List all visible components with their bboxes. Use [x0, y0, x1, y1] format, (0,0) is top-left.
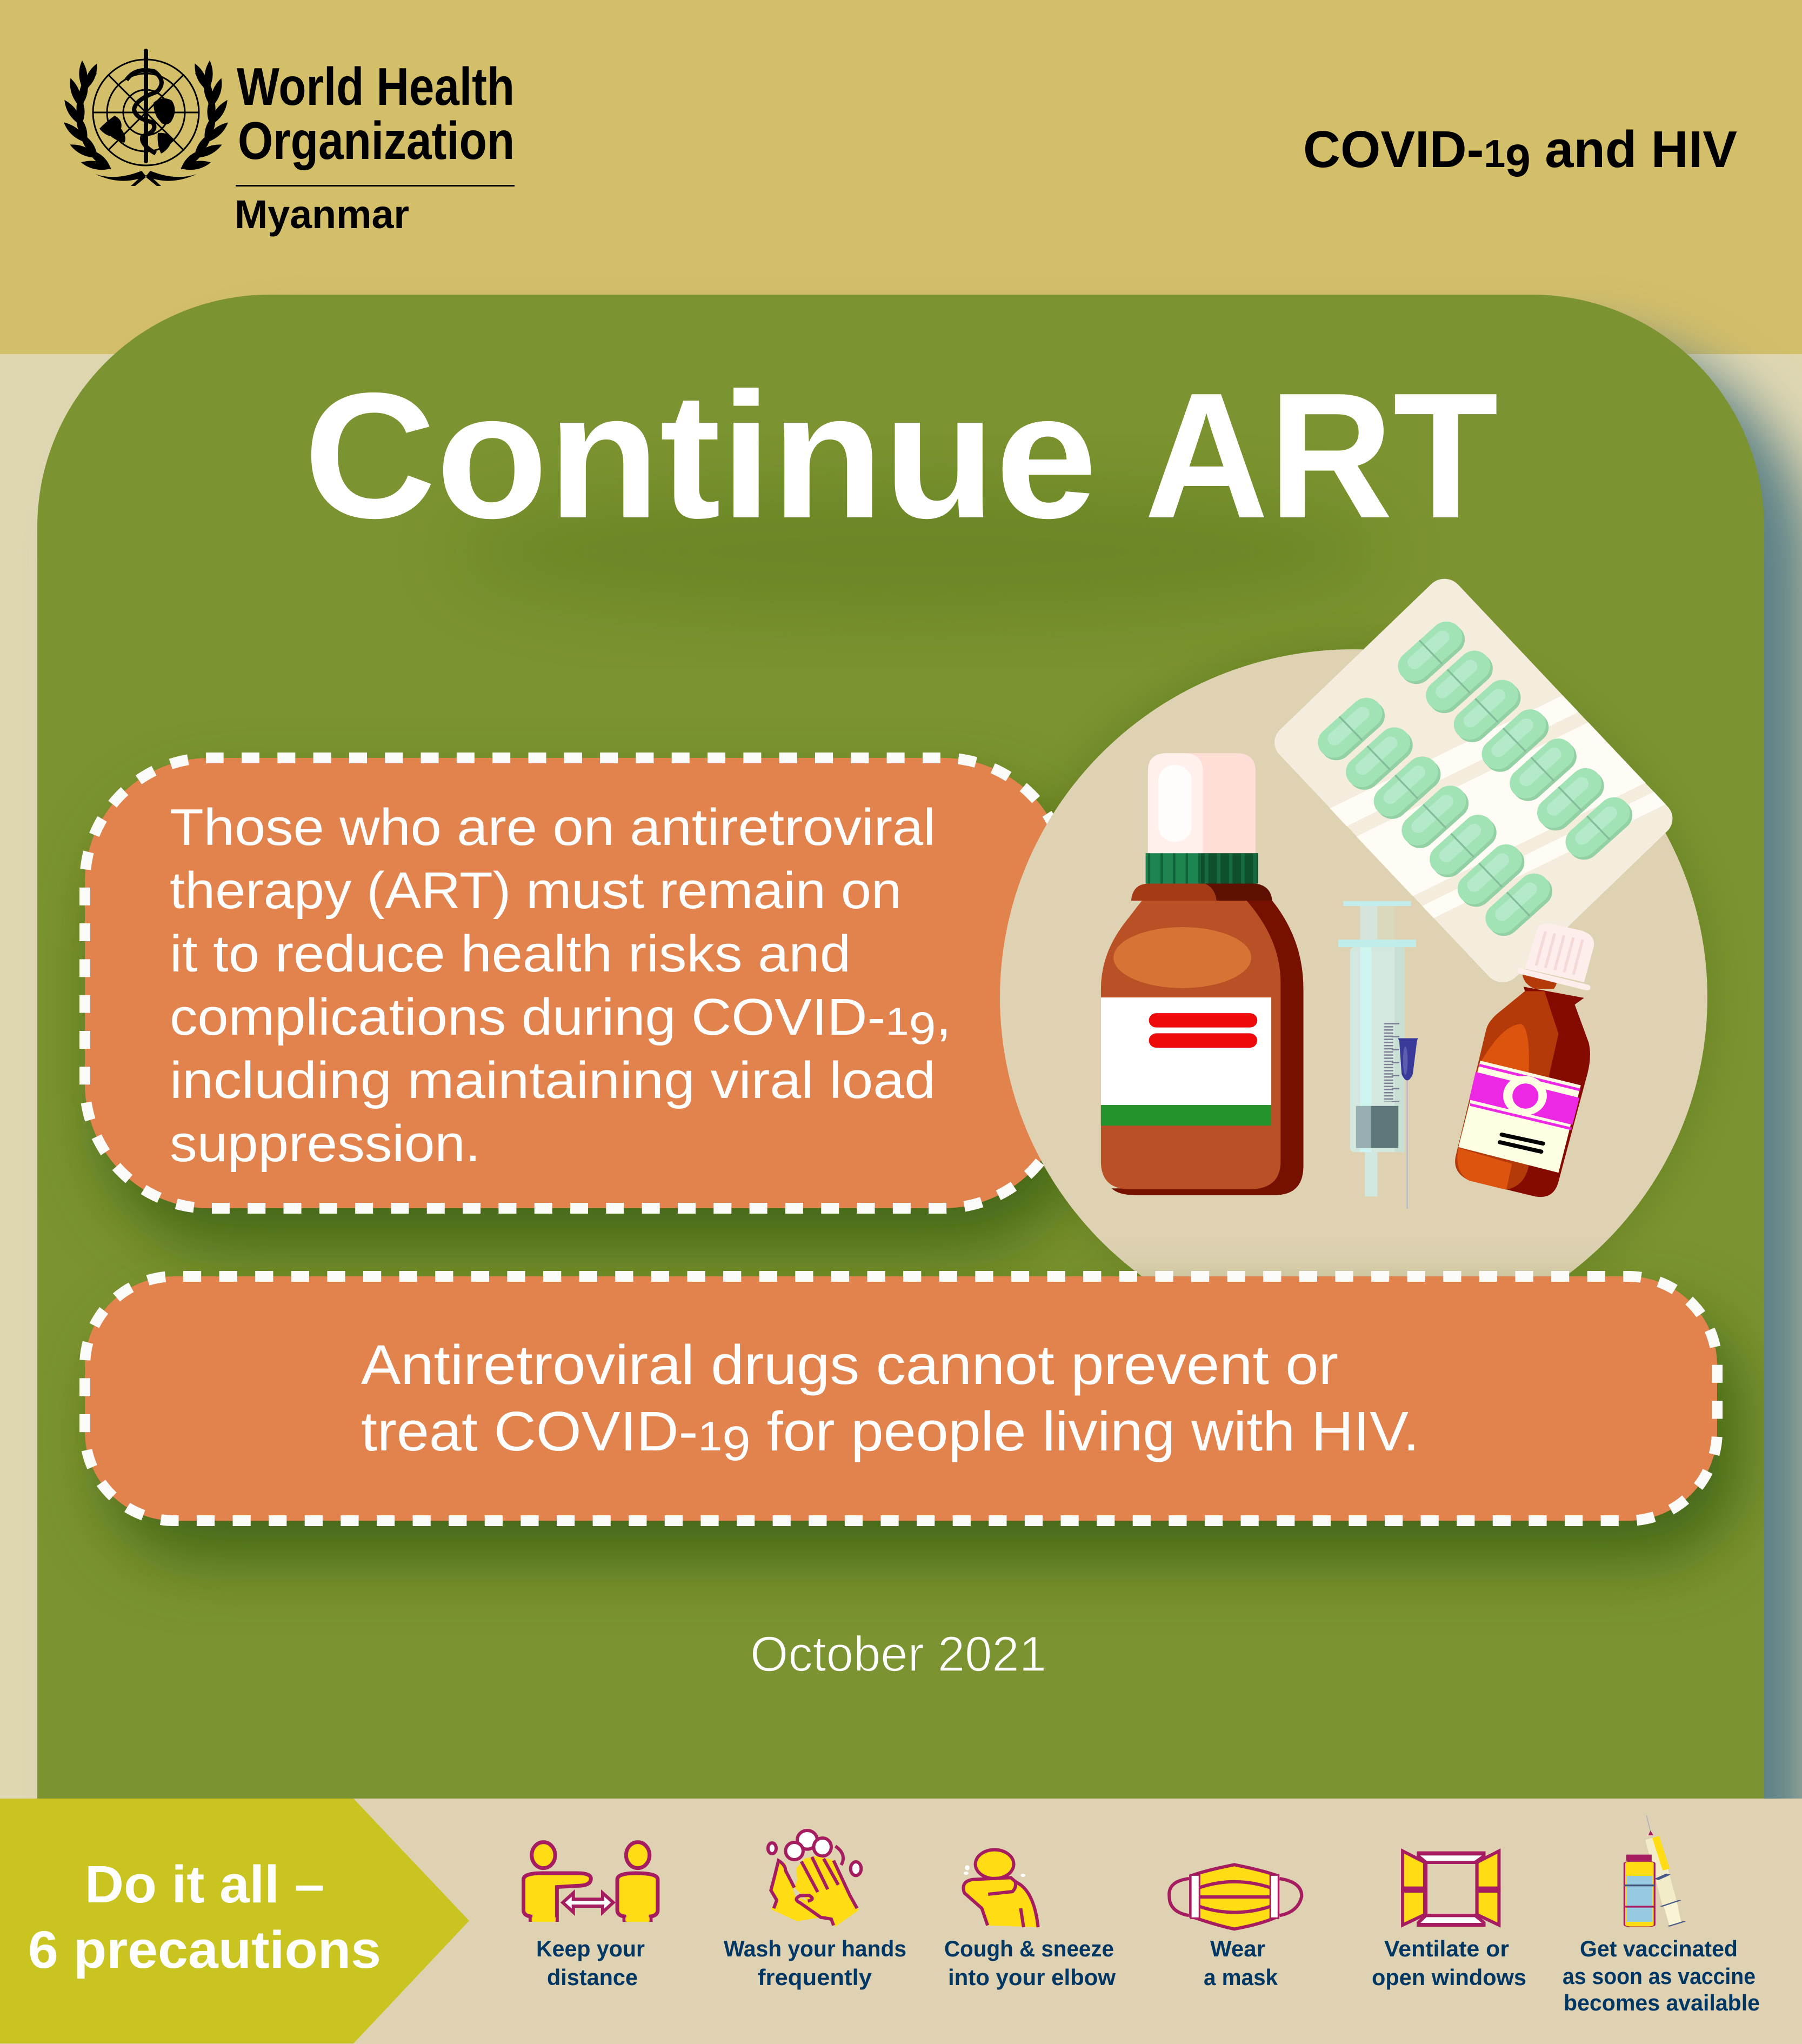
body text: for people living with HIV. — [751, 1400, 1419, 1462]
label: distance — [547, 1965, 638, 1990]
chevron: do it all: Do it all – — [85, 1855, 324, 1914]
bubble shadow — [106, 1314, 1739, 1559]
label: a mask — [1204, 1965, 1278, 1990]
label: Ventilate or — [1384, 1936, 1509, 1961]
body text: 9 — [722, 1417, 751, 1471]
precaution: keep your distance — [524, 1842, 658, 1990]
body text: complications during COVID- 1 — [170, 988, 907, 1046]
icon: soapy hands — [768, 1830, 861, 1927]
icon: person coughing into elbow — [963, 1850, 1038, 1927]
date: October 2021 — [750, 1627, 1046, 1682]
label: as soon as vaccine — [1563, 1963, 1756, 1989]
label — [1204, 1936, 1278, 1990]
subject heading: and HIV — [1531, 121, 1737, 178]
side bands behind panel — [0, 354, 1802, 1799]
precaution: cough and sneeze — [944, 1850, 1116, 1990]
body text: 9 — [909, 1003, 936, 1054]
header band — [0, 0, 1802, 354]
body text — [361, 1334, 1419, 1471]
icon: open window — [1403, 1851, 1499, 1926]
body text: Antiretroviral drugs cannot prevent or — [361, 1334, 1338, 1396]
body text: treat COVID- 1 — [361, 1400, 721, 1462]
WHO logo — [62, 49, 515, 237]
wordmark: World Health — [237, 57, 515, 116]
subject heading: COVID-1 — [1303, 121, 1505, 178]
label — [1563, 1936, 1760, 2015]
chevron: do it all — [0, 1799, 469, 2043]
icon: face mask — [1169, 1865, 1302, 1929]
body text: therapy (ART) must remain on — [170, 862, 902, 920]
label — [724, 1936, 906, 1990]
body text — [170, 798, 951, 1173]
label: Cough & sneeze — [944, 1936, 1114, 1961]
title — [304, 356, 1498, 556]
bottom strip — [0, 1799, 1802, 2044]
wordmark: Organization — [238, 111, 515, 170]
label — [536, 1936, 645, 1990]
body text: , — [936, 988, 951, 1046]
label: becomes available — [1564, 1990, 1760, 2015]
label — [944, 1936, 1116, 1990]
body text: suppression. — [170, 1115, 480, 1173]
body text: it to reduce health risks and — [170, 925, 851, 983]
wordmark: Myanmar — [235, 192, 409, 237]
main green panel — [37, 295, 1764, 1799]
blister pack — [1293, 597, 1666, 964]
label: open windows — [1372, 1965, 1526, 1990]
precaution: wear a mask — [1169, 1865, 1302, 1990]
precaution: get vaccinated — [1563, 1815, 1760, 2015]
bubble shape — [85, 1276, 1717, 1521]
label — [1372, 1936, 1526, 1990]
title: ART — [1144, 356, 1498, 556]
illustration: medicines — [1101, 597, 1666, 1209]
syringe — [1338, 901, 1418, 1209]
callout: stay on ART — [85, 758, 1067, 1208]
panel inner shading — [103, 487, 1717, 1354]
label: into your elbow — [948, 1965, 1116, 1990]
body text: including maintaining viral load — [170, 1051, 936, 1109]
callout: ARVs do not prevent COVID-19 — [85, 1276, 1717, 1521]
label: Wash your hands — [724, 1936, 906, 1961]
precaution: ventilate — [1372, 1851, 1526, 1990]
label: Keep your — [536, 1936, 645, 1961]
precaution: wash hands — [724, 1830, 906, 1990]
label: frequently — [758, 1965, 872, 1990]
small medicine bottle — [1455, 923, 1594, 1197]
panel drop shadow — [1587, 301, 1802, 1799]
subject heading: 9 — [1505, 135, 1531, 186]
large medicine bottle — [1101, 753, 1304, 1195]
icon: two people apart — [524, 1842, 658, 1922]
label: Get vaccinated — [1580, 1936, 1738, 1961]
bubble shape — [85, 758, 1067, 1208]
wordmark — [235, 57, 515, 237]
icon: vaccine vial and syringe — [1624, 1815, 1685, 1927]
emblem — [62, 49, 230, 186]
medicine circle background — [1000, 649, 1707, 1346]
title: Continue — [304, 356, 1097, 556]
label: Wear — [1210, 1936, 1265, 1961]
chevron: do it all: 6 precautions — [28, 1920, 381, 1979]
body text: Those who are on antiretroviral — [170, 798, 936, 856]
